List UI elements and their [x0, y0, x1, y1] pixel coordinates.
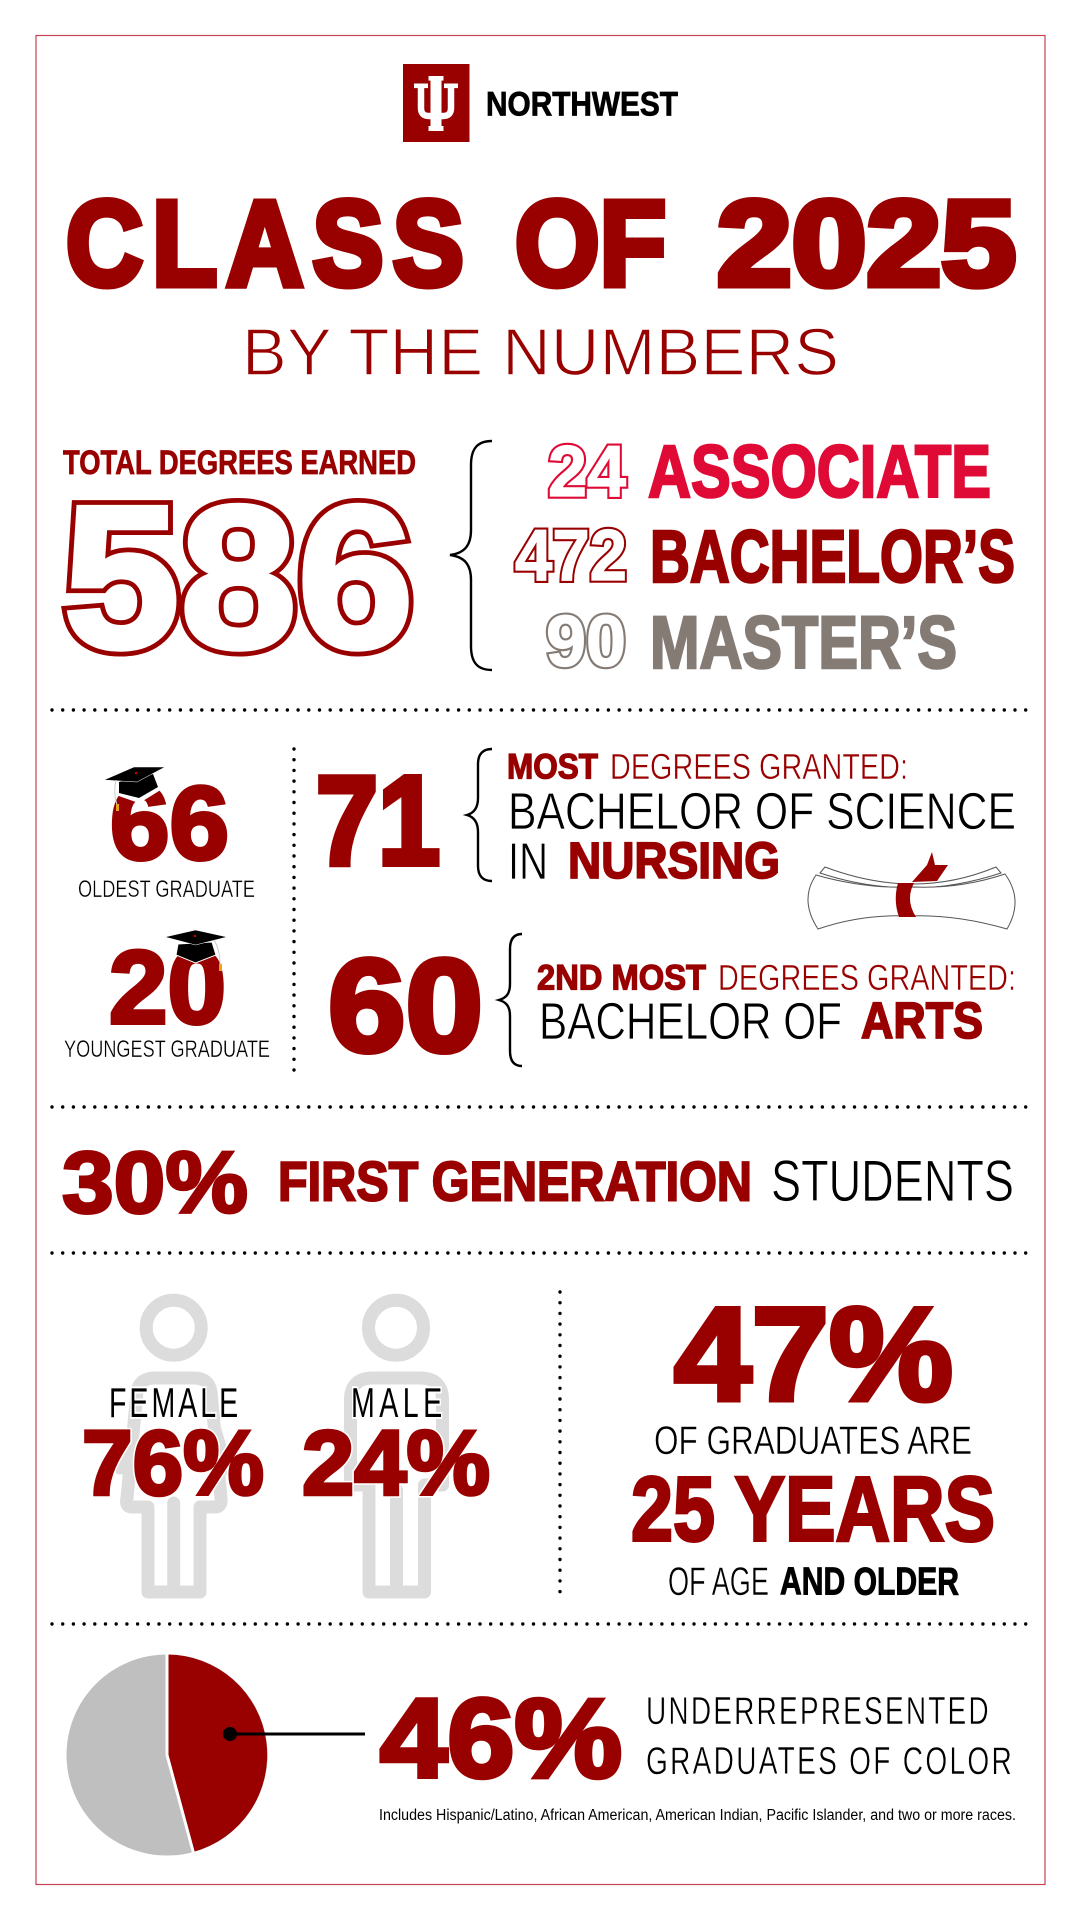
brace: degrees: [450, 441, 492, 670]
row: associate: [548, 430, 991, 513]
icon: graduation cap: [104, 767, 165, 811]
row: master's: 90: [546, 602, 626, 682]
text: 25 years: 25 YEARS: [631, 1458, 995, 1560]
title: Class of 2025: [66, 175, 1016, 312]
panel: most degrees granted: [316, 746, 1016, 929]
number: 586 outlined: 586: [63, 464, 414, 692]
brace: [467, 749, 492, 881]
heading: total degrees earned: TOTAL DEGREES EARNED: [63, 444, 416, 482]
panel: female: [82, 1300, 264, 1592]
number: 47%: 47%: [674, 1281, 953, 1429]
panel: oldest graduate: [78, 766, 255, 903]
number: 24%: 24%: [302, 1412, 490, 1514]
text: in nursing: IN: [508, 833, 548, 891]
panel: youngest graduate: [64, 930, 270, 1063]
chart: pie 46 percent: [66, 1654, 268, 1856]
row: associate: 24: [548, 432, 626, 512]
number: 60: 60: [328, 932, 483, 1079]
text: of age and older: OF AGE: [668, 1560, 769, 1604]
text: most degrees granted: [507, 746, 908, 787]
text: students: STUDENTS: [771, 1149, 1014, 1214]
text: of age and older: [668, 1560, 959, 1604]
number: 76%: 76%: [82, 1412, 264, 1514]
panel: age: [631, 1281, 995, 1604]
icon: female figure: [120, 1300, 226, 1592]
logo wordmark: NORTHWEST: [486, 86, 678, 124]
icon: diploma scroll: [808, 852, 1015, 929]
text: 2nd most degrees granted: [537, 957, 1016, 998]
icon: graduation cap: [165, 930, 227, 971]
row: associate: ASSOCIATE: [648, 430, 991, 513]
row: bachelor's: [515, 515, 1015, 598]
row: bachelor's: 472: [515, 516, 627, 596]
number: 76%: 76%: [82, 1412, 264, 1514]
callout line: [223, 1727, 365, 1741]
label: youngest graduate: YOUNGEST GRADUATE: [64, 1036, 270, 1063]
number: 71: 71: [316, 750, 440, 891]
number: 586 outlined: 586: [63, 464, 414, 692]
row: bachelor's: 472: [515, 516, 627, 596]
panel: second most degrees granted: [328, 932, 1016, 1079]
row: master's: MASTER’S: [650, 601, 957, 684]
text: in nursing: NURSING: [568, 832, 780, 889]
text: most degrees granted: DEGREES GRANTED:: [610, 746, 908, 787]
row: associate: 24: [548, 432, 626, 512]
row: master's: [546, 601, 957, 684]
text: 2nd most degrees granted: 2ND MOST: [537, 958, 706, 998]
panel: first generation: [62, 1134, 1014, 1232]
icon: male figure: [350, 1300, 442, 1592]
footnote: Includes Hispanic/Latino, African American, American Indian, Pacific Islander, and two or more races.: [379, 1807, 1016, 1824]
panel: male: [302, 1300, 490, 1592]
text: graduates of color: GRADUATES OF COLOR: [646, 1740, 1012, 1783]
title: Class of 2025: OF: [515, 175, 666, 311]
text: in nursing: [508, 832, 780, 891]
label: male: MALE: [351, 1378, 442, 1426]
number: 20: 20: [109, 930, 226, 1046]
label: female: FEMALE: [109, 1378, 238, 1426]
brace: [499, 934, 522, 1066]
text: underrepresented: UNDERREPRESENTED: [646, 1690, 989, 1733]
logo: IU Northwest: [403, 64, 678, 142]
number: 30%: 30%: [62, 1134, 248, 1232]
panel: graduates of color: [66, 1654, 1016, 1856]
row: master's: 90: [546, 602, 626, 682]
text: of age and older: AND OLDER: [780, 1560, 959, 1604]
title: Class of 2025: 2025: [717, 175, 1016, 311]
label: oldest graduate: OLDEST GRADUATE: [78, 876, 255, 903]
title: Class of 2025: CLASS: [66, 177, 464, 312]
text: bachelor of arts: BACHELOR OF: [539, 993, 842, 1051]
text: 2nd most degrees granted: DEGREES GRANTED:: [718, 957, 1016, 998]
number: 66: 66: [110, 766, 229, 882]
number: 24%: 24%: [302, 1412, 490, 1514]
text: most degrees granted: MOST: [507, 748, 598, 786]
panel: total degrees: [63, 430, 1015, 692]
text: first generation: FIRST GENERATION: [278, 1150, 752, 1212]
text: of graduates are: OF GRADUATES ARE: [654, 1419, 972, 1463]
icon: IU trident mark: [403, 64, 470, 142]
text: bachelor of arts: ARTS: [861, 992, 983, 1049]
number: 46%: 46%: [380, 1676, 622, 1801]
subtitle: By the numbers: BY THE NUMBERS: [242, 315, 839, 390]
